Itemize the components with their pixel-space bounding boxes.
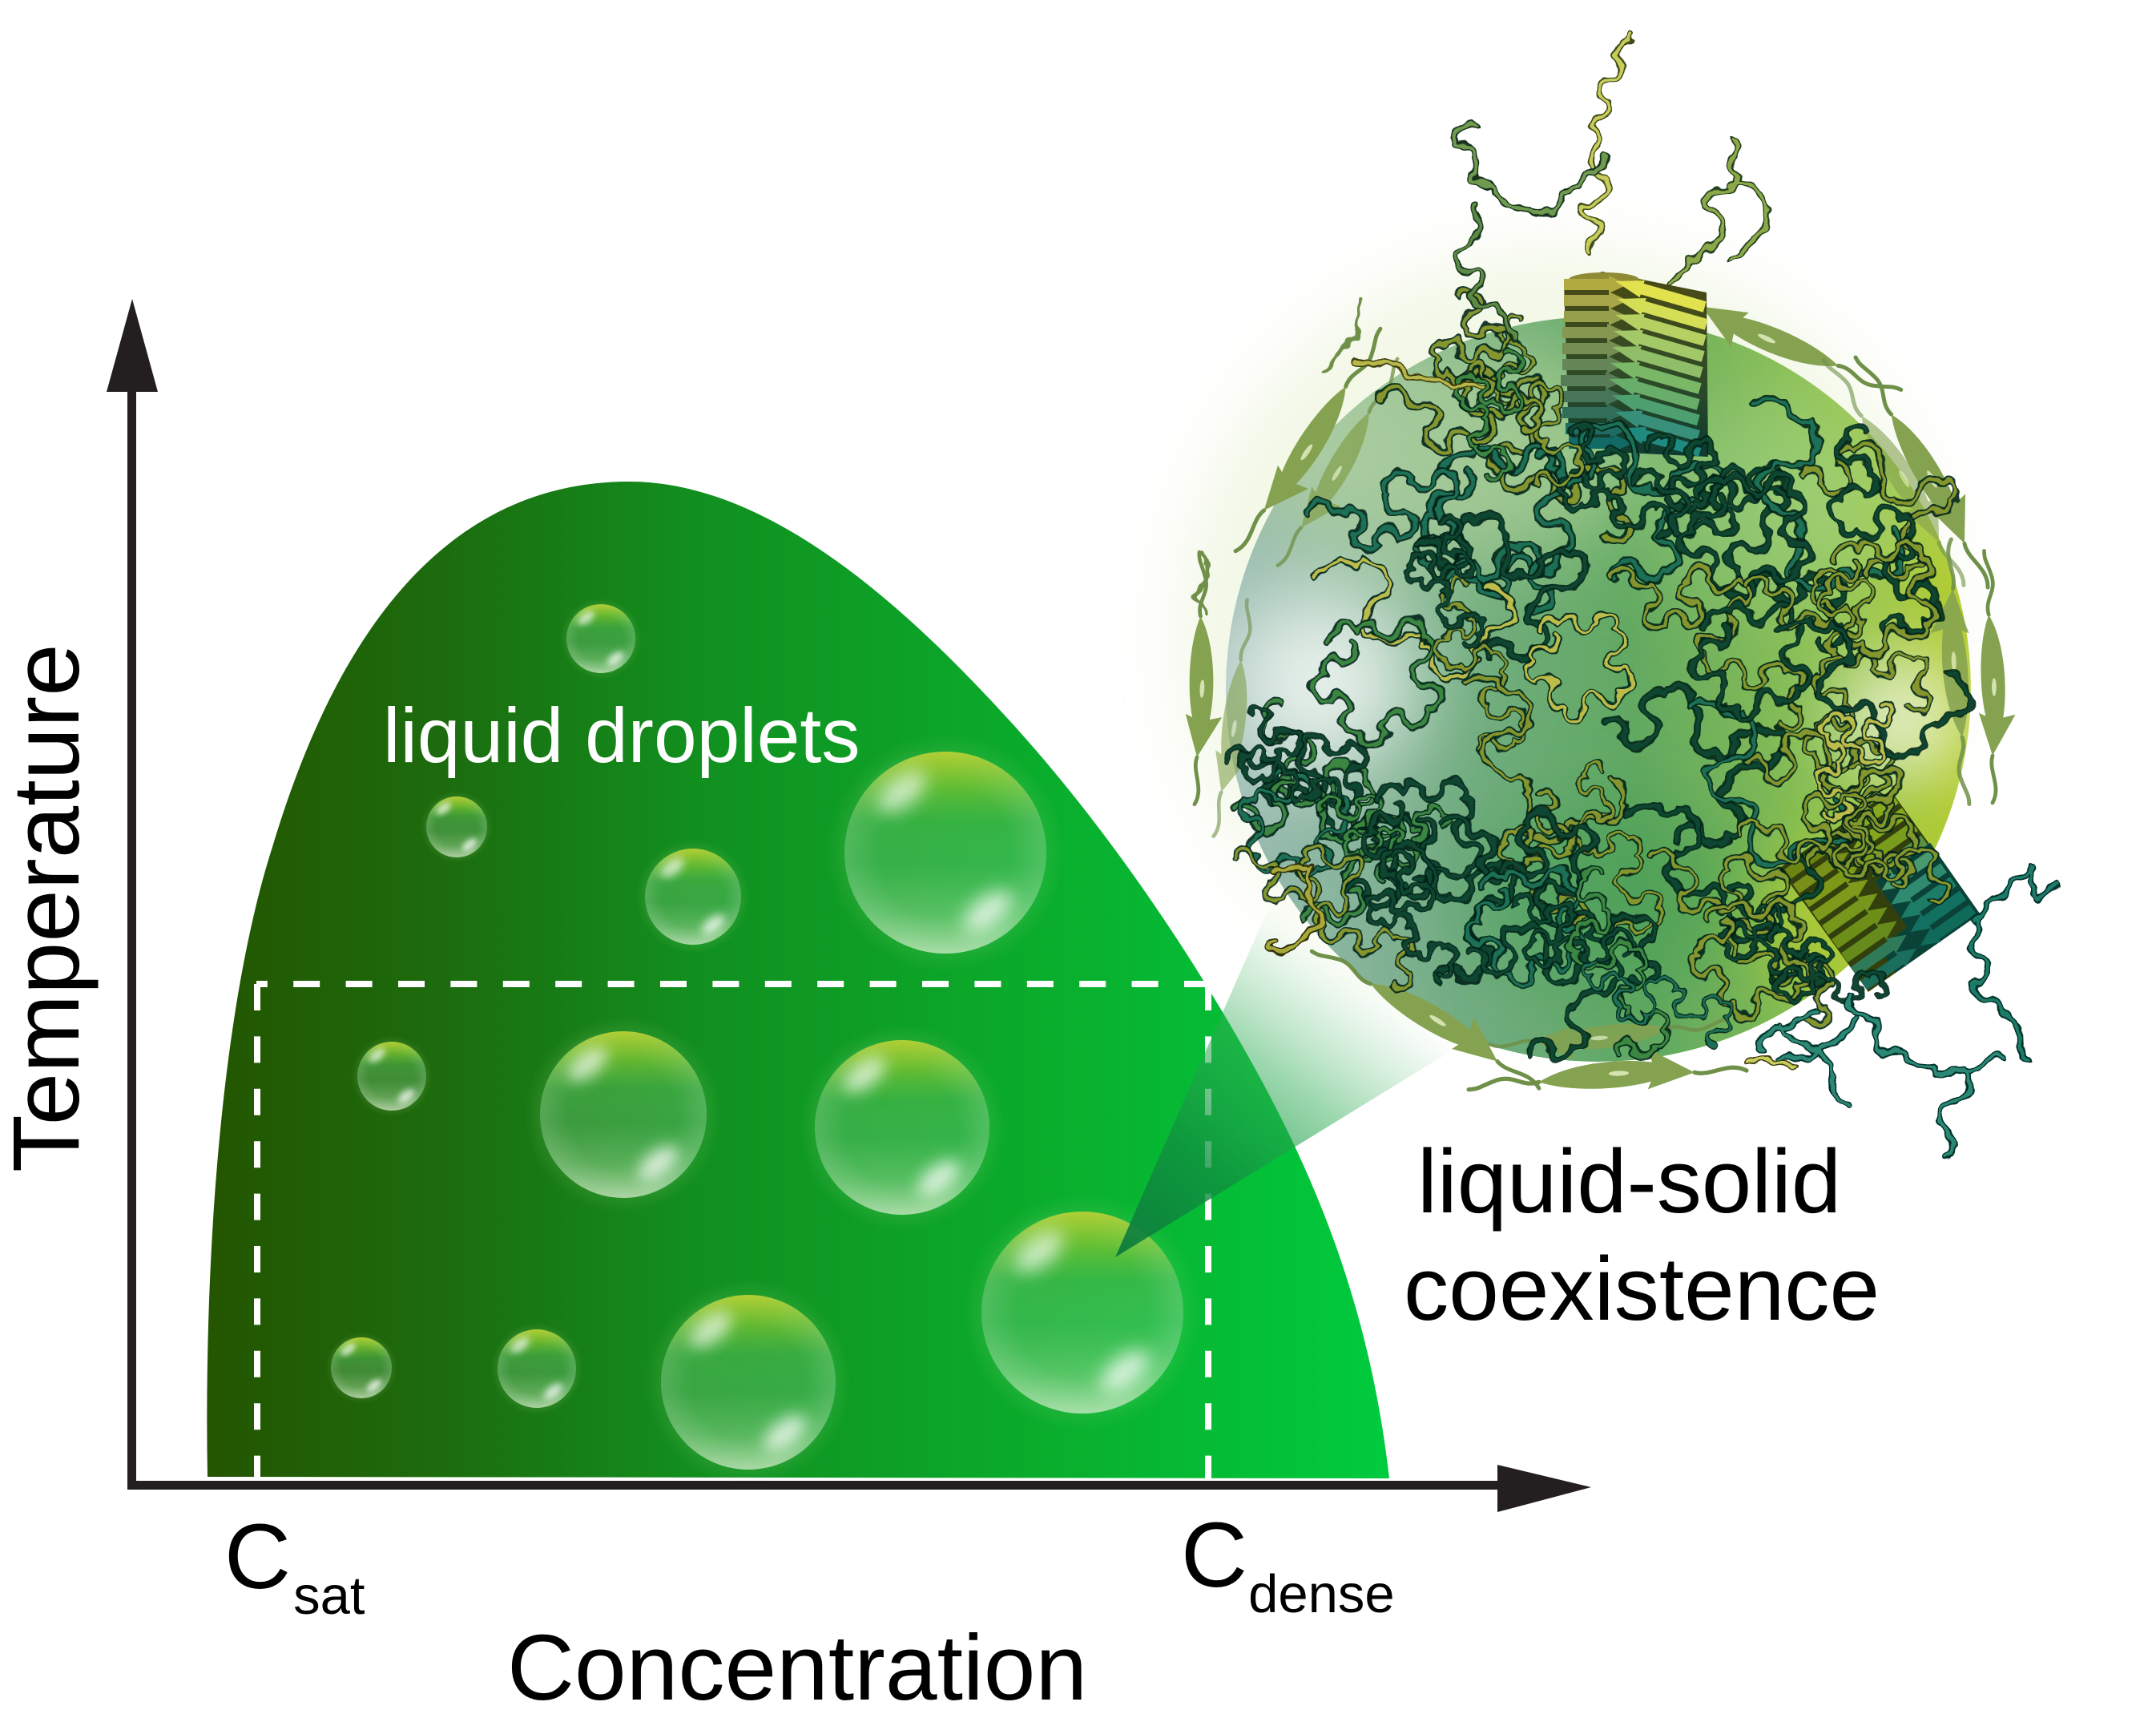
sphere outer glow [1178,248,1947,1018]
x axis arrow [127,1465,1591,1512]
disordered protein chains [1196,36,2057,1157]
liquid-solid coexistence label: coexistence [1404,1238,1880,1339]
zoom cone from droplet to sphere [1115,897,1460,1257]
top amyloid fibril [1561,272,1709,460]
droplet 1 [560,598,642,679]
chains: lower right teal tails [1759,868,2057,1157]
chains: center [1466,551,1941,934]
C dense label: dense [1248,1564,1395,1624]
lower right amyloid fibril [1779,789,1981,994]
droplets in the dome [325,598,1202,1486]
droplet 5 [351,1035,433,1117]
chains: long tails on top [1354,36,1767,386]
beta hairpin ribbons [1181,272,2016,1100]
chains: left cluster [1219,668,1534,1002]
C sat label: sat [293,1566,365,1626]
droplet 4 [826,733,1065,972]
chains: lower left tails [1196,298,1795,1067]
droplet 10 [490,1322,583,1415]
droplet 11 [645,1279,852,1486]
chains: bottom [1425,748,1888,1076]
droplet 3 [636,840,750,954]
axes [107,299,1591,1512]
C sat label: C [224,1506,291,1608]
droplet 8 [963,1193,1202,1432]
sphere body [1226,317,1995,1062]
droplet 7 [799,1024,1005,1231]
y axis arrow [107,299,158,1490]
protein condensate sphere [1178,36,2057,1157]
chains: upper left [1302,453,1586,749]
droplet 9 [325,1332,397,1404]
Concentration axis label: Concentration [507,1615,1087,1720]
phase diagram dome [207,482,1389,1478]
droplet 2 [421,791,493,863]
C dense label: C [1181,1504,1247,1607]
liquid-solid coexistence label: liquid-solid [1417,1131,1841,1232]
dashed coexistence box [256,984,1211,1490]
droplet 6 [525,1016,722,1213]
chains: top band [1378,285,1957,648]
liquid droplets label: liquid droplets [383,693,860,779]
chains: right side [1734,540,1981,939]
